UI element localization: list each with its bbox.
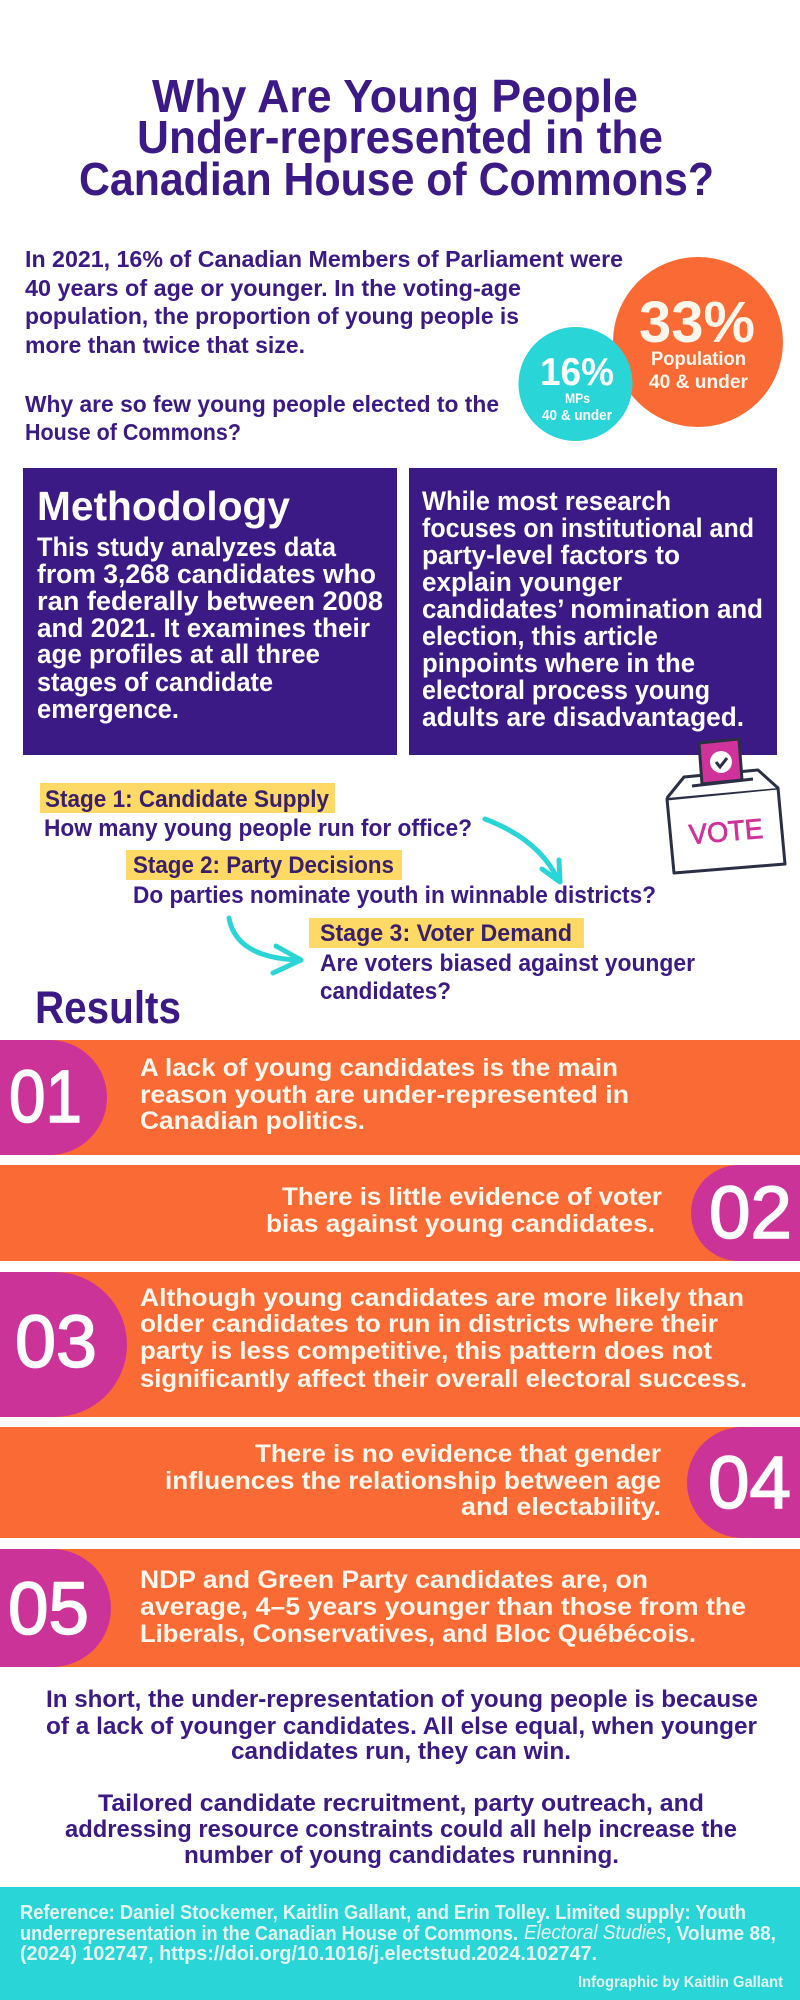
- result 01: reason youth are under-represented in: [140, 1081, 629, 1109]
- icon: ballot box: VOTE: [688, 813, 764, 850]
- methodology text: and 2021. It examines their: [37, 613, 370, 643]
- footer panel: [0, 1887, 800, 2000]
- title: [79, 70, 714, 205]
- reference text: Reference: Daniel Stockemer, Kaitlin Gallant, and Erin Tolley. Limited supply: Youth: [20, 1902, 746, 1924]
- arrow: stage 1 to stage 2: [485, 819, 560, 882]
- panel: research focus: pinpoints where in the: [422, 648, 695, 678]
- panel: research focus: explain younger: [422, 567, 622, 597]
- stat: 16% MPs circle: 16%: [540, 351, 614, 394]
- arrow: stage 2 to stage 3: [229, 918, 301, 973]
- result 02: There is little evidence of voter: [282, 1183, 662, 1211]
- result 01: [0, 1040, 800, 1155]
- stage 2: Do parties nominate youth in winnable districts?: [133, 882, 656, 909]
- panel: research focus: [409, 468, 777, 755]
- stage 1: [40, 783, 472, 842]
- result 02: 02: [709, 1171, 792, 1254]
- intro text: In 2021, 16% of Canadian Members of Parliament were: [25, 246, 623, 272]
- result 02: [0, 1165, 800, 1261]
- intro text: Why are so few young people elected to the: [25, 391, 499, 417]
- result 04: There is no evidence that gender: [255, 1440, 661, 1468]
- title: Under-represented in the: [137, 111, 663, 163]
- methodology text: [37, 532, 383, 724]
- stat: 33% population circle: 40 & under: [649, 372, 749, 393]
- result 05: 05: [8, 1567, 89, 1650]
- stage 3: Are voters biased against younger: [320, 950, 695, 977]
- result 01: Canadian politics.: [140, 1107, 365, 1135]
- methodology text: This study analyzes data: [37, 532, 336, 562]
- panel: methodology: [23, 468, 397, 755]
- reference text: underrepresentation in the Canadian House of Commons.: [20, 1923, 518, 1945]
- heading: results: Results: [35, 982, 181, 1033]
- stage 1: How many young people run for office?: [44, 815, 472, 842]
- stat: 33% population circle: [613, 257, 783, 427]
- panel: research focus: election, this article: [422, 621, 658, 651]
- result 01: A lack of young candidates is the main: [140, 1054, 618, 1082]
- conclusion text: addressing resource constraints could all help increase the: [65, 1816, 737, 1843]
- conclusion text: of a lack of younger candidates. All else equal, when younger: [46, 1713, 757, 1740]
- intro text: [25, 246, 623, 445]
- result 03: Although young candidates are more likely than: [140, 1284, 744, 1312]
- stat: 33% population circle: Population: [651, 349, 746, 370]
- stat: 16% MPs circle: [518, 327, 632, 441]
- conclusion text: number of young candidates running.: [184, 1842, 619, 1869]
- result 04: 04: [708, 1441, 791, 1524]
- stage 2: Stage 2: Party Decisions: [133, 852, 394, 879]
- result 03: significantly affect their overall electoral success.: [140, 1365, 747, 1393]
- reference text: (2024) 102747, https://doi.org/10.1016/j.electstud.2024.102747.: [20, 1943, 597, 1965]
- result 03: 03: [15, 1300, 97, 1383]
- stat: 16% MPs circle: 40 & under: [542, 407, 612, 424]
- conclusion text: candidates run, they can win.: [231, 1738, 571, 1765]
- conclusion text: In short, the under-representation of young people is because: [46, 1686, 758, 1713]
- methodology text: from 3,268 candidates who: [37, 559, 376, 589]
- panel: research focus: While most research: [422, 486, 671, 516]
- methodology text: age profiles at all three: [37, 639, 320, 669]
- infographic credit: Infographic by Kaitlin Gallant: [578, 1974, 784, 1991]
- panel: research focus: party-level factors to: [422, 540, 680, 570]
- stage 3: candidates?: [320, 978, 451, 1005]
- icon: ballot box: [667, 739, 785, 873]
- result 03: older candidates to run in districts where their: [140, 1310, 718, 1338]
- result 01: 01: [9, 1055, 82, 1138]
- reference text: Electoral Studies: [524, 1922, 666, 1944]
- stat: 33% population circle: 33%: [639, 290, 755, 355]
- methodology text: ran federally between 2008: [37, 586, 383, 616]
- stage 2: [126, 850, 656, 909]
- result 03: [0, 1272, 800, 1417]
- intro text: more than twice that size.: [25, 332, 305, 358]
- heading: methodology: Methodology: [37, 483, 290, 529]
- intro text: House of Commons?: [25, 419, 241, 445]
- reference text: , Volume 88,: [666, 1923, 776, 1945]
- panel: research focus: adults are disadvantaged.: [422, 702, 744, 732]
- methodology text: stages of candidate: [37, 667, 273, 697]
- result 03: party is less competitive, this pattern does not: [140, 1337, 713, 1365]
- stage 1: Stage 1: Candidate Supply: [45, 786, 330, 813]
- intro text: 40 years of age or younger. In the voting-age: [25, 275, 521, 301]
- intro text: population, the proportion of young people is: [25, 303, 519, 329]
- methodology text: emergence.: [37, 694, 179, 724]
- result 04: [0, 1427, 800, 1538]
- result 02: bias against young candidates.: [266, 1210, 655, 1238]
- title: Canadian House of Commons?: [79, 153, 714, 205]
- panel: research focus: candidates’ nomination and: [422, 594, 763, 624]
- panel: research focus: electoral process young: [422, 675, 710, 705]
- result 05: average, 4–5 years younger than those from the: [140, 1593, 746, 1621]
- result 04: influences the relationship between age: [165, 1467, 661, 1495]
- result 04: and electability.: [461, 1493, 661, 1521]
- title: Why Are Young People: [152, 70, 638, 122]
- reference text: [20, 1902, 776, 1965]
- stat: 16% MPs circle: MPs: [565, 390, 590, 406]
- result 05: NDP and Green Party candidates are, on: [140, 1566, 648, 1594]
- result 05: [0, 1549, 800, 1667]
- stage 3: [309, 918, 695, 1005]
- panel: research focus: focuses on institutional and: [422, 513, 754, 543]
- conclusion text: [46, 1686, 758, 1869]
- conclusion text: Tailored candidate recruitment, party outreach, and: [98, 1790, 704, 1817]
- result 05: Liberals, Conservatives, and Bloc Québécois.: [140, 1620, 696, 1648]
- stage 3: Stage 3: Voter Demand: [320, 920, 572, 947]
